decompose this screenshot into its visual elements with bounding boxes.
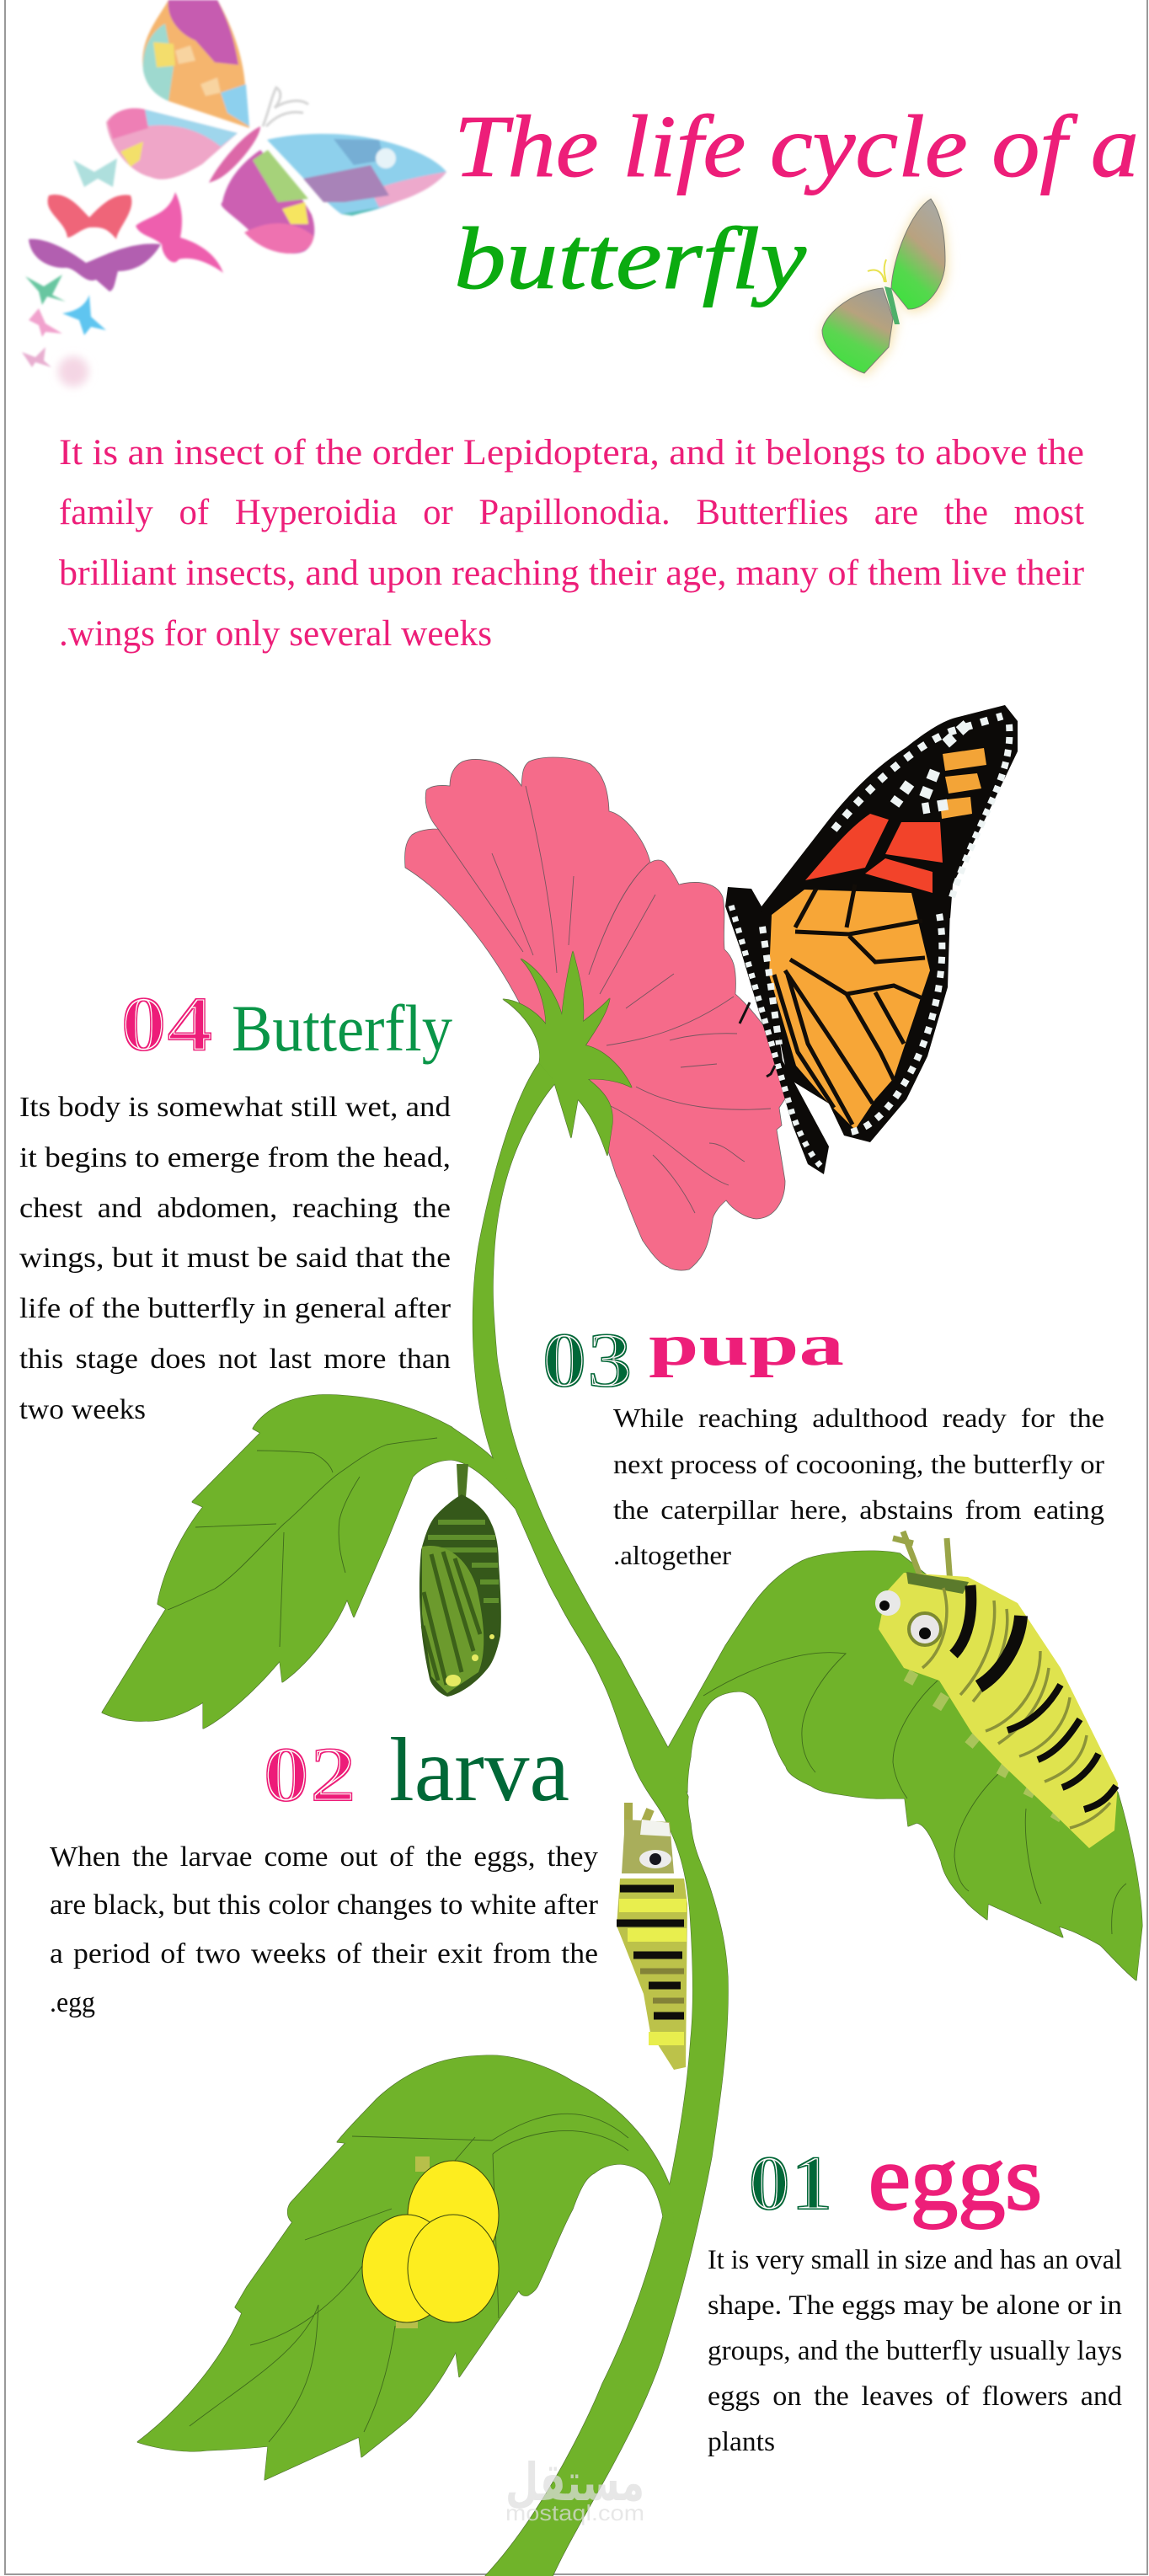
text: stage 01: It is very small in size and has an oval: [708, 2245, 1122, 2275]
heading: 04 Butterfly: Butterfly: [232, 991, 452, 1065]
watermark: مستقل: [505, 2451, 644, 2513]
illustration: egg cluster: [362, 2156, 499, 2328]
legs: [740, 1002, 775, 1077]
upper wing: [891, 199, 945, 309]
eye: [639, 1850, 671, 1868]
text: stage 01: eggs on the leaves of flowers and: [708, 2381, 1123, 2412]
abdomen and wing base: [725, 887, 829, 1174]
text: stage 01: shape. The eggs may be alone or in: [708, 2290, 1122, 2321]
thin stripes: [922, 1588, 1110, 1828]
wing stripes: [423, 1552, 480, 1685]
head band: [906, 1572, 969, 1594]
text: stage 04: this stage does not last more than: [19, 1344, 451, 1375]
head: [622, 1820, 674, 1873]
antennae: [868, 259, 886, 282]
heading: 02 larva: 02: [263, 1731, 356, 1819]
antennae: [628, 1803, 650, 1845]
hindwing: [762, 906, 950, 1142]
larva specks: [396, 2156, 430, 2328]
text: stage 02: are black, but this color changes to white after: [50, 1889, 599, 1921]
stalk: [457, 1464, 468, 1498]
teal butterfly: [73, 158, 117, 187]
text: stage 02: a period of two weeks of their exit from the: [50, 1938, 598, 1969]
illustration: pastel butterfly: [22, 0, 446, 387]
hindwing veins: [774, 884, 925, 1125]
hindwing white spots: [731, 906, 942, 1167]
green butterfly: [25, 275, 66, 305]
illustration: plant: [102, 951, 1142, 2576]
coral butterfly: [48, 195, 131, 239]
text: stage 03: the caterpillar here, abstains from eating: [613, 1494, 1104, 1525]
upper left leaf: [102, 1395, 516, 1729]
illustration: chrysalis: [420, 1464, 501, 1697]
gold dots: [446, 1634, 494, 1686]
heading: 04 Butterfly: [120, 981, 452, 1068]
body: [884, 286, 900, 324]
text: stage 01: plants: [708, 2427, 775, 2457]
calyx: [503, 951, 632, 1156]
main stem: [473, 1063, 728, 2576]
illustration: monarch butterfly: [725, 705, 1018, 1174]
watermark: mostaql.com: [505, 2500, 644, 2525]
heading: 03 pupa: [542, 1313, 844, 1404]
left wing: [106, 109, 238, 179]
yellow bands: [619, 1905, 687, 2039]
purple butterfly: [29, 239, 161, 291]
text: stage 03: .altogether: [613, 1540, 731, 1570]
red patches: [805, 814, 943, 893]
forewing: [758, 705, 1018, 927]
right egg: [408, 2215, 499, 2322]
upper wing: [142, 0, 249, 128]
text: stage 02: [50, 1841, 599, 2018]
text: stage 02: When the larvae come out of the eggs, they: [50, 1841, 598, 1873]
dark bands: [617, 1889, 684, 2016]
text: stage 04: wings, but it must be said that the: [19, 1243, 451, 1274]
text: stage 03: [613, 1403, 1104, 1570]
right lower wing: [222, 150, 314, 254]
leaf veins: [168, 1438, 1126, 2442]
forewing orange spots: [940, 748, 986, 819]
heading: 01 eggs: 01: [748, 2140, 833, 2227]
body: [879, 1573, 1118, 1848]
glow: [822, 199, 947, 376]
text: stage 04: [19, 1092, 452, 1425]
heading: 03 pupa: pupa: [649, 1313, 844, 1378]
lower left leaf: [137, 2055, 674, 2480]
legs: [908, 1672, 1060, 1820]
illustration: pink flower: [405, 757, 788, 1270]
body and antennae: [209, 88, 308, 183]
text: stage 02: .egg: [50, 1987, 95, 2018]
illustration: small caterpillar: [617, 1803, 687, 2070]
petal veins: [438, 786, 771, 1213]
small butterflies: [22, 158, 223, 387]
text: stage 04: life of the butterfly in general after: [19, 1293, 452, 1324]
watermark: [505, 2451, 644, 2525]
case: [420, 1494, 501, 1697]
wing case: [422, 1546, 484, 1693]
illustration: green title butterfly: [822, 199, 947, 376]
forewing white spots: [834, 716, 1009, 897]
heading: 03 pupa: 03: [542, 1317, 633, 1404]
heading: 02 larva: [263, 1720, 569, 1820]
blue butterfly: [62, 295, 106, 335]
right upper wing: [267, 134, 446, 216]
text: stage 01: groups, and the butterfly usually lays: [708, 2336, 1122, 2366]
blurred butterfly: [58, 356, 88, 387]
title: The life cycle of a: [454, 97, 1139, 195]
lower wing: [822, 288, 893, 373]
text: stage 04: chest and abdomen, reaching the: [19, 1193, 451, 1224]
light pink butterfly: [29, 308, 62, 337]
illustration: large caterpillar: [875, 1531, 1118, 1848]
heading: 01 eggs: eggs: [868, 2127, 1042, 2229]
text: introduction: [59, 433, 1084, 654]
upper egg: [408, 2161, 499, 2270]
text: stage 03: While reaching adulthood ready for the: [613, 1403, 1104, 1433]
eyes: [875, 1590, 941, 1645]
text: stage 04: two weeks: [19, 1394, 146, 1425]
right leaf: [668, 1551, 1142, 1980]
text: introduction: .wings for only several weeks: [59, 614, 492, 654]
title: butterfly: [454, 209, 806, 307]
pink butterfly: [136, 192, 223, 273]
bands: [425, 1522, 499, 1601]
hindwing orange: [769, 890, 930, 1130]
heading: 04 Butterfly: 04: [120, 981, 213, 1068]
text: stage 04: Its body is somewhat still wet, and: [19, 1092, 451, 1123]
text: introduction: brilliant insects, and upon reaching their age, many of them live their: [59, 553, 1084, 593]
text: stage 01: [708, 2245, 1123, 2457]
title: [454, 97, 1139, 307]
body: [617, 1879, 687, 2070]
heading: 02 larva: larva: [389, 1720, 569, 1820]
heading: 01 eggs: [748, 2127, 1042, 2229]
text: stage 04: it begins to emerge from the head,: [19, 1142, 451, 1173]
left egg: [362, 2215, 452, 2322]
text: introduction: family of Hyperoidia or Papillonodia. Butterflies are the most: [59, 493, 1084, 532]
black stripes: [954, 1585, 971, 1654]
antennae: [893, 1531, 950, 1584]
text: stage 03: next process of cocooning, the butterfly or: [613, 1449, 1104, 1479]
pale pink butterfly: [22, 347, 51, 367]
text: introduction: It is an insect of the order Lepidoptera, and it belongs to above the: [59, 433, 1084, 473]
